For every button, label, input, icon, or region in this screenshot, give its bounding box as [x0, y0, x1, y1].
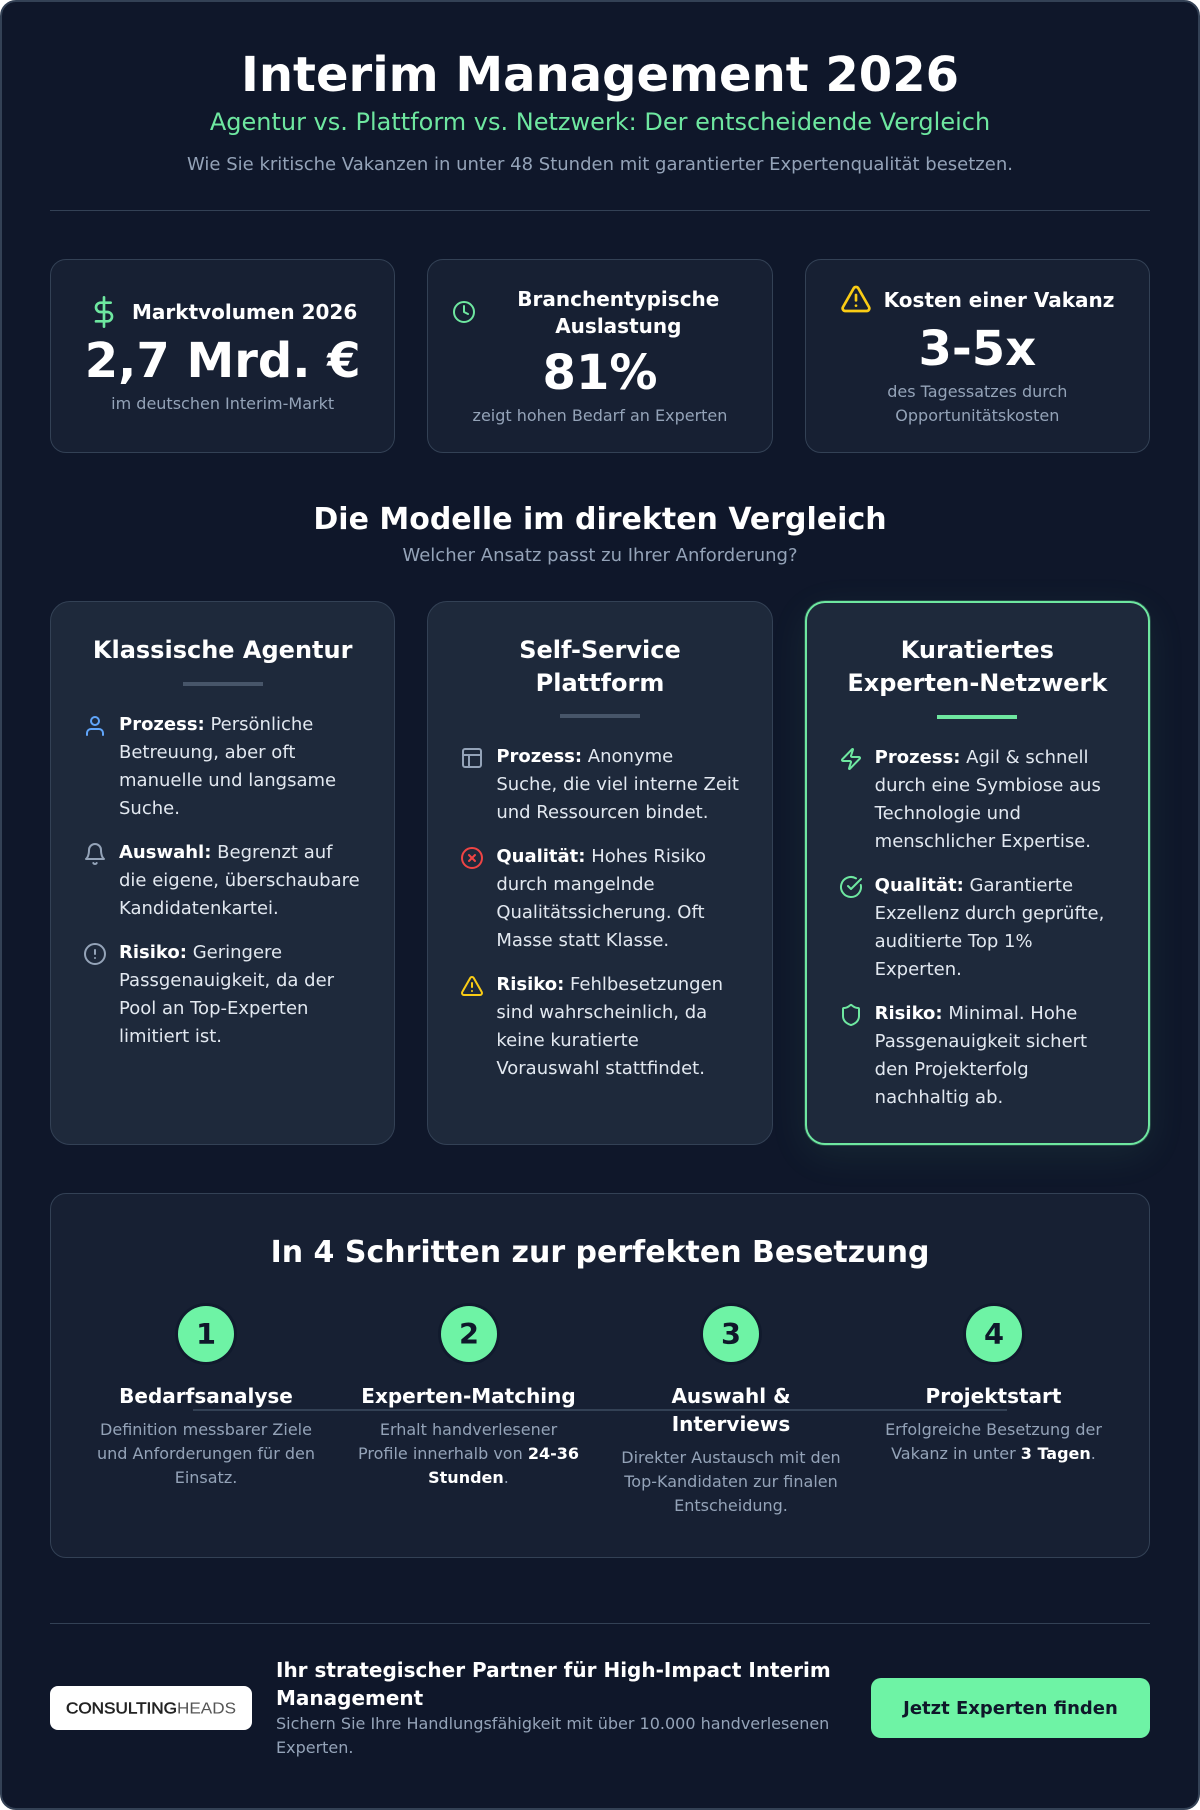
step number 4: 4 — [984, 1317, 1004, 1351]
stat label — [517, 287, 719, 338]
item: Risiko: den Projekterfolg — [875, 1058, 1029, 1080]
button — [871, 1678, 1150, 1738]
item: Prozess: Technologie und — [875, 802, 1021, 824]
item: Prozess: durch eine Symbiose aus — [875, 774, 1101, 796]
step number 4 — [966, 1306, 1022, 1362]
item: Auswahl: die eigene, überschaubare — [119, 870, 360, 890]
item: Risiko — [842, 1002, 1087, 1108]
step 4 text: Erfolgreiche Besetzung der — [885, 1420, 1102, 1438]
item: Qualität: Masse statt Klasse. — [496, 930, 669, 950]
item: Risiko — [461, 974, 723, 1078]
item: Qualität: Qualität: Hohes Risiko — [496, 846, 706, 866]
item: Risiko: Risiko: Geringere — [119, 942, 282, 962]
item: Prozess: Prozess: Anonyme — [496, 746, 673, 766]
step number 1: 1 — [196, 1317, 216, 1351]
step number 2 — [441, 1306, 497, 1362]
step 1 text — [97, 1384, 315, 1487]
item: Prozess — [462, 746, 739, 822]
stat label: Auslastung — [555, 314, 681, 338]
step 4 text: Vakanz in unter 3 Tagen. — [891, 1444, 1096, 1463]
title: Interim Management 2026 — [241, 47, 959, 103]
stat value: 3-5x — [918, 321, 1036, 377]
card heading: Klassische Agentur — [93, 636, 352, 664]
stat label: Kosten einer Vakanz — [884, 288, 1114, 312]
item: Prozess: manuelle und langsame — [119, 770, 336, 790]
step 2 text — [358, 1384, 579, 1487]
item: Auswahl — [85, 842, 360, 918]
item: Qualität: Exzellenz durch geprüfte, — [875, 902, 1104, 924]
step 3 text: Entscheidung. — [674, 1496, 788, 1515]
item: Risiko: Risiko: Minimal. Hohe — [875, 1002, 1077, 1024]
item: Prozess — [841, 746, 1101, 852]
item: Qualität: Experten. — [875, 958, 962, 980]
card heading — [519, 636, 681, 697]
item: Risiko: Passgenauigkeit sichert — [875, 1030, 1087, 1052]
item: Risiko — [84, 942, 334, 1046]
step number 3: 3 — [721, 1317, 741, 1351]
step 2 text: Profile innerhalb von 24-36 — [358, 1444, 579, 1463]
step 2 text: Stunden. — [428, 1468, 509, 1487]
stat note: des Tagessatzes durch — [887, 382, 1067, 401]
item: Qualität: Qualität: Garantierte — [875, 874, 1073, 896]
icon: clock — [453, 301, 475, 323]
panel: Klassische Agentur — [50, 601, 395, 1145]
item: Qualität: durch mangelnde — [496, 874, 655, 894]
icon: dollar — [94, 296, 114, 328]
footer text: Sichern Sie Ihre Handlungsfähigkeit mit über 10.000 handverlesenen — [276, 1714, 829, 1733]
item: Risiko: Vorauswahl stattfindet. — [496, 1058, 705, 1078]
item: Risiko: keine kuratierte — [496, 1030, 639, 1050]
step 4 text: Projektstart — [926, 1384, 1061, 1408]
step 3 text: Top-Kandidaten zur finalen — [624, 1472, 838, 1491]
item: Risiko: nachhaltig ab. — [875, 1086, 1003, 1108]
item: Qualität — [461, 846, 706, 950]
item: Auswahl: Auswahl: Begrenzt auf — [119, 842, 332, 862]
panel: Vakanz stat — [805, 259, 1150, 453]
footer text — [276, 1658, 831, 1757]
item: Prozess — [86, 714, 336, 818]
step number 3 — [703, 1306, 759, 1362]
step 2 text: Erhalt handverlesener — [380, 1420, 557, 1438]
item: Auswahl: Kandidatenkartei. — [119, 898, 279, 918]
icon: warning — [841, 286, 871, 312]
panel: Auslastung stat — [427, 259, 773, 453]
stat note: Opportunitätskosten — [895, 406, 1059, 425]
step 4 text — [885, 1384, 1102, 1463]
panel: Kuratiertes Experten-Netzwerk — [805, 601, 1150, 1145]
item: Risiko: sind wahrscheinlich, da — [496, 1002, 707, 1022]
step 1 text: Bedarfsanalyse — [119, 1384, 293, 1408]
stat note: zeigt hohen Bedarf an Experten — [473, 406, 727, 425]
stat label: Branchentypische — [517, 287, 719, 311]
item: Qualität — [840, 874, 1104, 980]
subtitle: Agentur vs. Plattform vs. Netzwerk: Der entscheidende Vergleich — [210, 108, 990, 136]
step 1 text: Definition messbarer Ziele — [100, 1420, 312, 1438]
item: Risiko: Passgenauigkeit, da der — [119, 970, 334, 990]
stat note: im deutschen Interim-Markt — [111, 394, 334, 413]
step 3 text: Auswahl & — [671, 1384, 791, 1408]
item: Prozess: Suche. — [119, 798, 180, 818]
item: Qualität: Qualitätssicherung. Oft — [496, 902, 705, 922]
card heading: Experten-Netzwerk — [847, 669, 1107, 697]
logo — [50, 1686, 252, 1730]
step number 2: 2 — [459, 1317, 479, 1351]
stat label: Marktvolumen 2026 — [132, 300, 357, 324]
step 1 text: Einsatz. — [175, 1468, 237, 1487]
card heading: Kuratiertes — [901, 636, 1054, 664]
item: Risiko: Pool an Top-Experten — [119, 998, 308, 1018]
item: Risiko: limitiert ist. — [119, 1026, 222, 1046]
footer text: Management — [276, 1686, 423, 1710]
steps heading: In 4 Schritten zur perfekten Besetzung — [271, 1234, 929, 1270]
tagline: Wie Sie kritische Vakanzen in unter 48 Stunden mit garantierter Expertenqualität besetzen. — [187, 154, 1013, 175]
step 2 text: Experten-Matching — [361, 1384, 576, 1408]
stat value: 81% — [543, 345, 657, 401]
footer text: Ihr strategischer Partner für High-Impact Interim — [276, 1658, 831, 1682]
item: Risiko: Risiko: Fehlbesetzungen — [496, 974, 723, 994]
item: Prozess: Prozess: Persönliche — [119, 714, 313, 734]
button: Jetzt Experten finden — [903, 1698, 1118, 1719]
item: Prozess: Prozess: Agil & schnell — [875, 746, 1089, 768]
item: Prozess: und Ressourcen bindet. — [496, 802, 708, 822]
step 1 text: und Anforderungen für den — [97, 1444, 315, 1463]
card heading: Self-Service — [519, 636, 681, 664]
stat value: 2,7 Mrd. € — [85, 333, 361, 389]
panel: Self-Service Plattform — [427, 601, 773, 1145]
panel: Marktvolumen stat — [50, 259, 395, 453]
item: Prozess: Suche, die viel interne Zeit — [496, 774, 739, 794]
footer text: Experten. — [276, 1738, 354, 1757]
item: Qualität: auditierte Top 1% — [875, 930, 1033, 952]
stat note — [887, 382, 1067, 425]
step 3 text — [621, 1384, 841, 1515]
section subheading: Welcher Ansatz passt zu Ihrer Anforderung? — [402, 545, 798, 566]
item: Prozess: menschlicher Expertise. — [875, 830, 1091, 852]
panel: process steps — [50, 1193, 1150, 1558]
logo: CONSULTING HEADS — [66, 1700, 236, 1717]
section heading: Die Modelle im direkten Vergleich — [313, 502, 887, 537]
step 3 text: Interviews — [672, 1412, 790, 1436]
card heading — [847, 636, 1108, 697]
card heading: Plattform — [536, 669, 664, 697]
step number 1 — [178, 1306, 234, 1362]
item: Prozess: Betreuung, aber oft — [119, 742, 295, 762]
step 3 text: Direkter Austausch mit den — [621, 1448, 841, 1466]
